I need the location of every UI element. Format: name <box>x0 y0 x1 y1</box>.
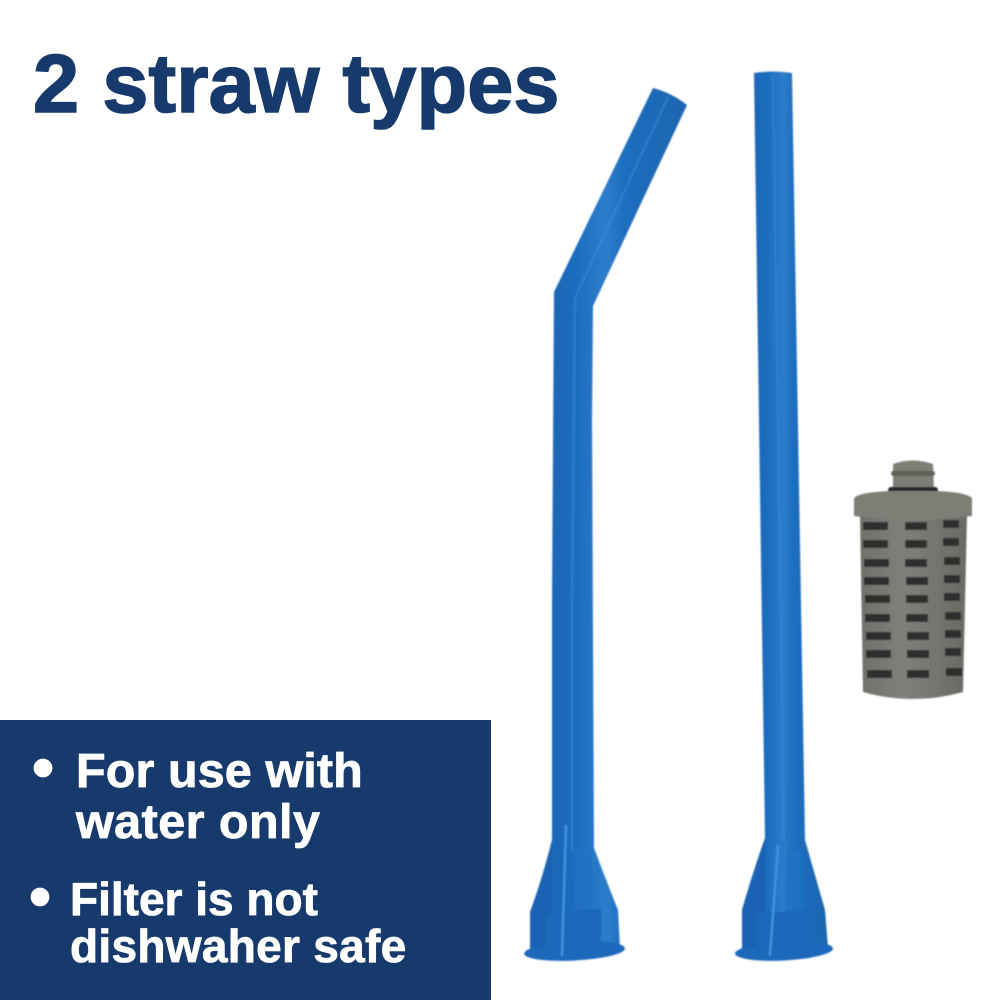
icon: bent straw <box>524 88 687 963</box>
filter neck <box>893 460 934 490</box>
bullet: water only <box>34 744 363 849</box>
filter cap <box>854 491 972 520</box>
bullet: water only: For use with <box>76 744 363 798</box>
bullet: filter care <box>31 873 407 972</box>
bullet: water only: water only <box>75 795 320 849</box>
panel: usage notes <box>0 720 491 1000</box>
bullet: filter care: dishwaher safe <box>70 920 407 972</box>
icon: straight straw <box>735 72 833 963</box>
straw base flange <box>524 825 625 963</box>
icon: filter cartridge <box>854 460 972 699</box>
filter slots <box>863 520 962 678</box>
filter body <box>860 515 967 699</box>
bullet: filter care: Filter is not <box>70 873 318 925</box>
straw base flange <box>735 838 833 963</box>
title: 2 straw types <box>33 37 560 130</box>
